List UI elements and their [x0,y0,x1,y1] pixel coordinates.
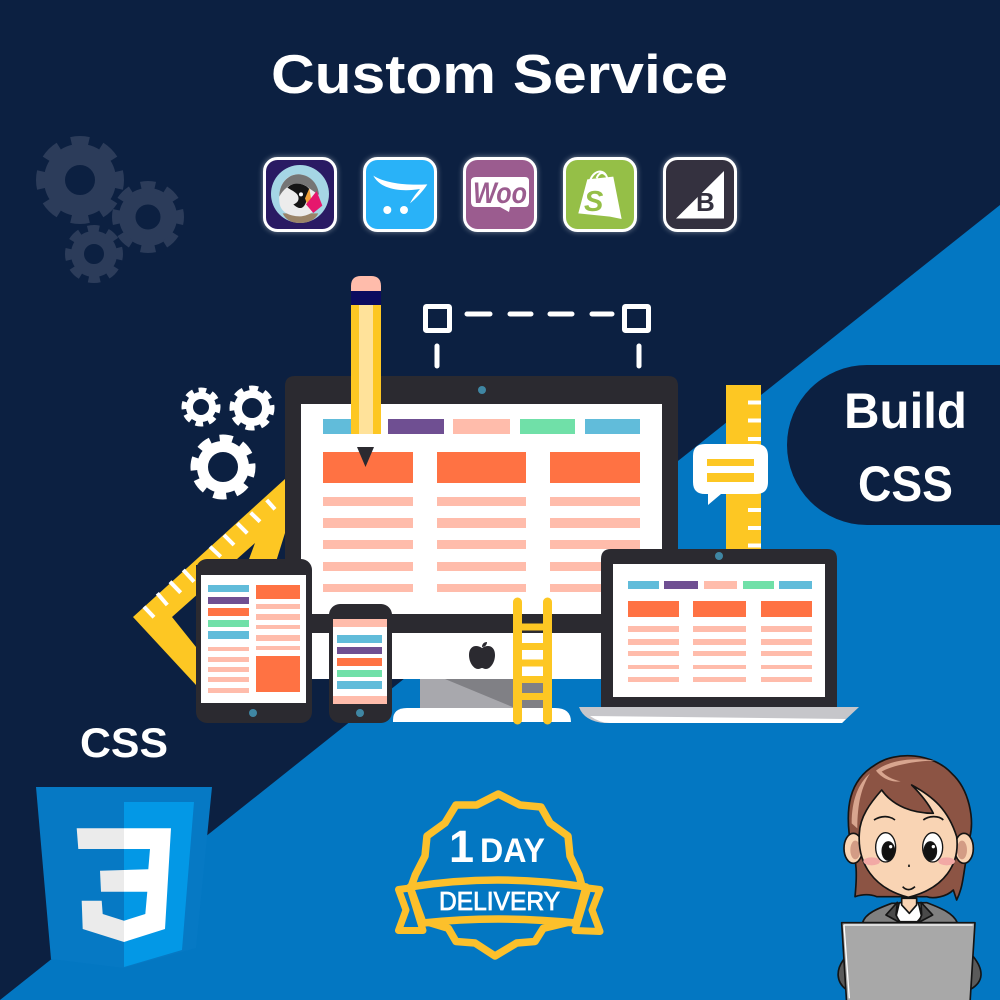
icon: Shopify [564,158,636,230]
left ear [844,833,863,863]
background: blue diagonal panel [0,205,1000,1000]
badge scalloped outline [410,794,583,956]
icon: Shopify: S [584,186,604,218]
icon: white gears [184,388,272,496]
monitor header bars [323,419,640,434]
icon: apple logo [469,642,495,669]
phone [329,604,392,723]
hair highlight [852,759,935,828]
icon: selection frame [426,306,648,366]
icon: OpenCart [364,158,436,230]
icon: WooCommerce: Woo [473,177,527,210]
monitor body [285,376,678,633]
right inner ear [957,841,967,859]
character: woman with laptop [838,756,981,1000]
icon: pencil [351,276,381,467]
badge text: 1 DAY: DAY [480,832,545,870]
platform icons row [264,158,736,230]
eyebrows, nose and mouth [874,817,943,890]
laptop screen bars [628,581,812,589]
text: CSS: CSS [858,456,953,512]
badge text: 1 DAY: 1 [449,821,474,872]
pill: Build CSS [787,365,1000,525]
title: Custom Service [271,43,728,105]
laptop lid [842,923,975,1000]
badge: 1 day delivery [398,794,600,956]
neck [902,898,917,913]
arms [838,957,981,989]
label: CSS: CSS [80,719,168,766]
icon: set square ruler [133,479,285,685]
shirt collar [896,903,922,922]
laptop base [579,707,859,723]
laptop body [601,549,837,707]
right ear [955,833,973,863]
jacket lapels [886,902,933,923]
icon: BigCommerce [664,158,736,230]
icon: faint background gears [40,140,180,280]
laptop [579,549,859,723]
icon: CSS3 shield [36,787,212,968]
monitor [285,376,678,722]
tablet [196,559,312,723]
jacket [863,903,957,923]
icon: WooCommerce [464,158,536,230]
badge text: DELIVERY: DELIVERY [439,886,560,916]
monitor columns [323,452,640,592]
icon: ladder [518,602,548,720]
hair [848,756,971,900]
badge ribbon [410,880,586,923]
laptop screen columns [628,601,812,682]
monitor stand [420,670,545,709]
icon: vertical ruler [726,385,761,550]
badge ribbon tails [398,888,600,932]
eyes [876,833,943,862]
left inner ear [850,841,860,859]
face [859,785,957,897]
text: Build: Build [844,383,967,439]
icon: BigCommerce: B [696,187,715,217]
icon: PrestaShop [264,158,336,230]
icon: chat bubble [693,444,768,505]
cheeks [863,857,955,865]
